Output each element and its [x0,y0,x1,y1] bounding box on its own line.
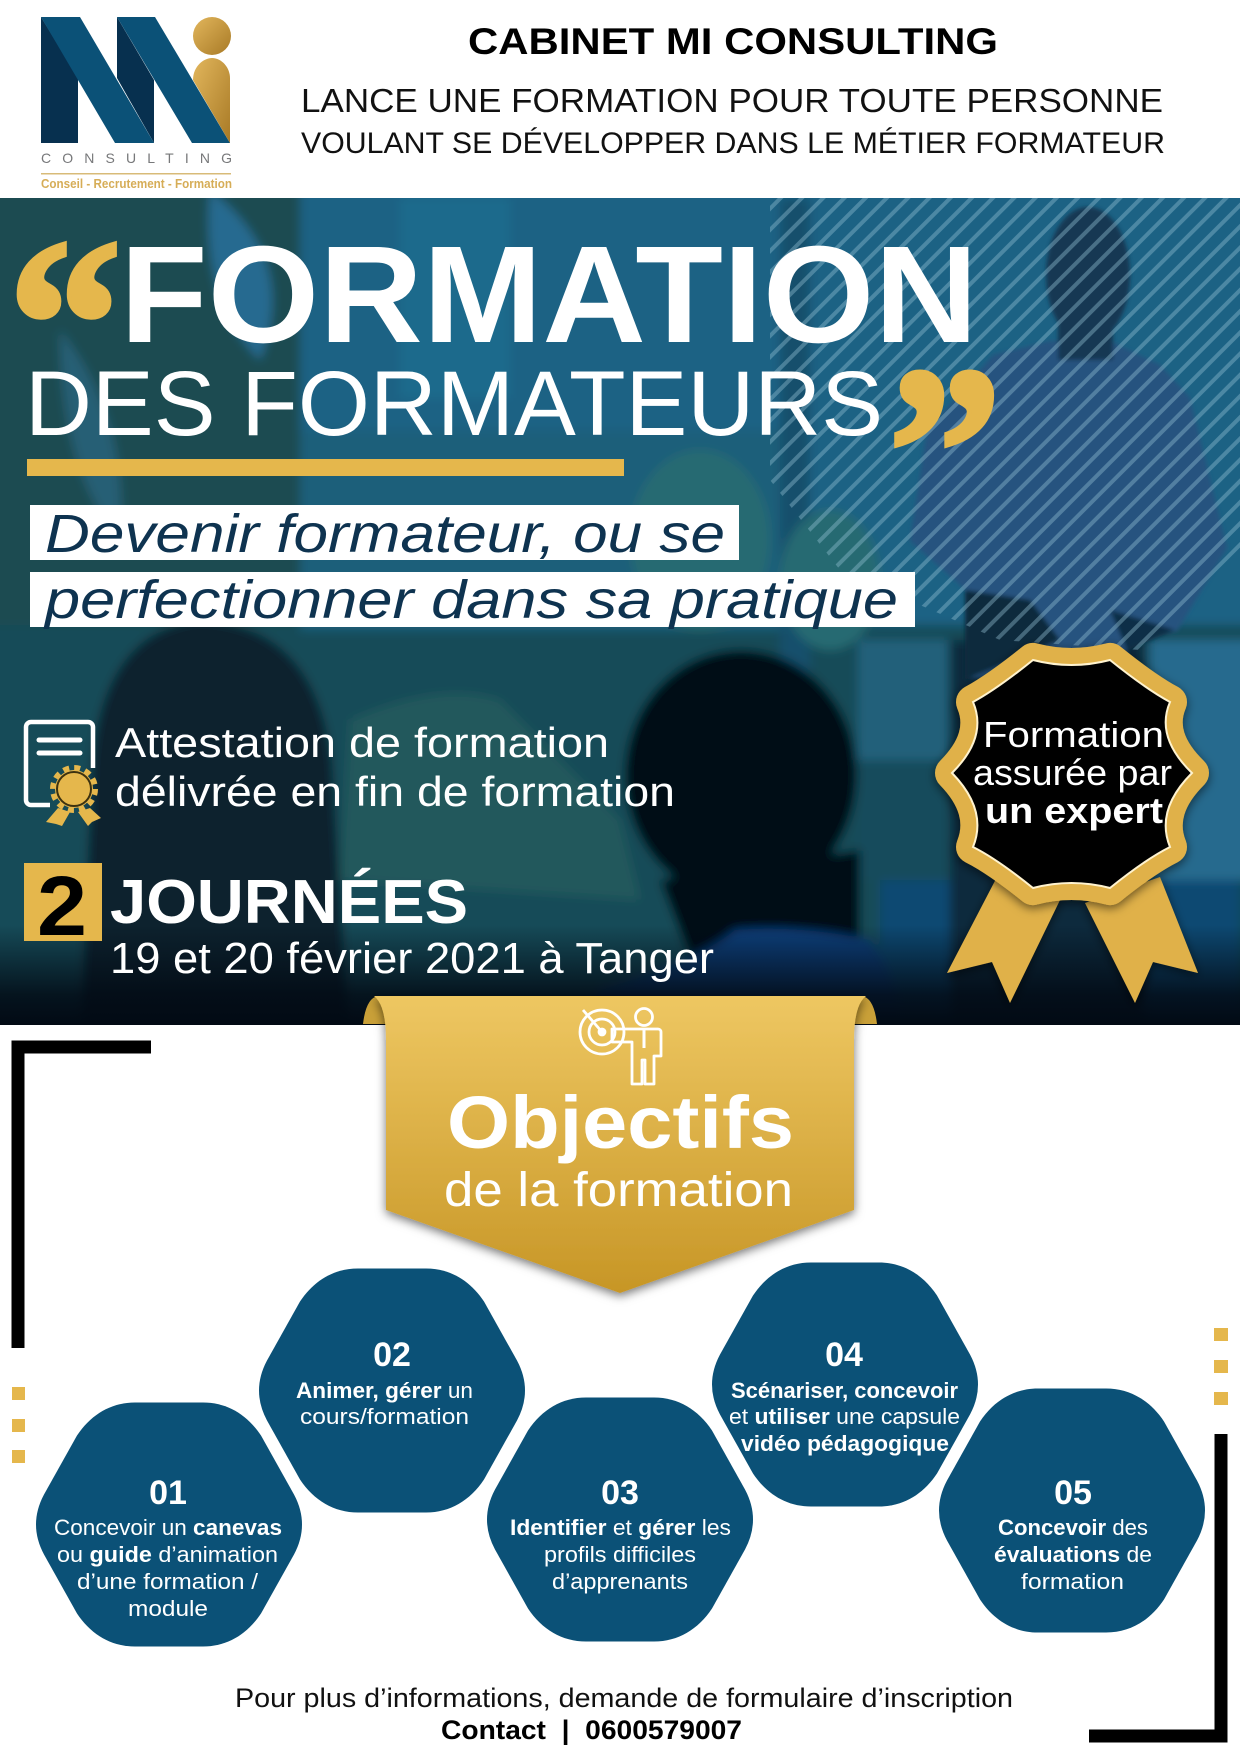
objective 01: d’une formation / [77,1569,259,1594]
objective 03: d’apprenants [552,1569,688,1594]
bottom-right corner bracket [1089,1434,1221,1736]
subtitle: DES FORMATEURS: DES FORMATEURS [25,353,883,455]
objective 04: Scénariser, concevoir [731,1378,958,1403]
attestation text: Attestation de formation [115,719,609,766]
header text [301,21,1165,160]
objective 01: 01 [149,1474,187,1512]
duration: 2 journées: JOURNÉES [110,868,468,937]
objective 03 [487,1398,753,1642]
badge: expert seal with ribbons: assurée par [973,752,1172,793]
objective 02: cours/formation [300,1404,469,1429]
footer contact: Pour plus d’informations, demande de formulaire d’inscription [235,1683,1013,1713]
logo: MI Consulting [41,17,232,191]
tagline boxes: perfectionner dans sa pratique [43,570,898,630]
header text: CABINET MI CONSULTING [468,21,998,62]
objective 03: profils difficiles [544,1542,696,1567]
top-left corner bracket [18,1047,151,1348]
objective 01: Concevoir un canevas [54,1515,282,1540]
objective 02: Animer, gérer un [296,1378,473,1403]
objective 04: vidéo pédagogique [741,1431,949,1456]
title: FORMATION: FORMATION [120,218,978,372]
duration: 2 journées [24,859,714,983]
closing quote mark: ” [888,318,1002,586]
icon: target and person [580,1008,661,1084]
banner: objectifs: de la formation [444,1164,793,1217]
objective 03: Identifier et gérer les [510,1515,731,1540]
objective 02: 02 [373,1336,411,1374]
objective 05: Concevoir des [998,1515,1148,1540]
header text: VOULANT SE DÉVELOPPER DANS LE MÉTIER FORMATEUR [301,127,1165,160]
objective 04: 04 [825,1336,863,1374]
banner: objectifs: Objectifs [447,1081,794,1164]
gold squares left [12,1387,25,1463]
objective 01: ou guide d’animation [57,1542,278,1567]
objective 01 [36,1402,302,1646]
objective 05 [939,1388,1205,1632]
icon: certificate [26,722,101,826]
gold underline [27,459,624,476]
logo: MI Consulting: CONSULTING [41,150,232,166]
footer contact [235,1683,1013,1745]
objective 05: formation [1021,1569,1124,1594]
objective 04: et utiliser une capsule [729,1404,960,1429]
badge: expert seal with ribbons: un expert [985,790,1163,831]
badge: expert seal with ribbons: Formation [983,714,1164,755]
attestation text [115,719,675,815]
footer contact: Contact | 0600579007 [441,1715,742,1745]
hero photo background [0,180,1240,1045]
banner: objectifs [363,996,877,1293]
objective 04 [712,1262,978,1506]
header text: LANCE UNE FORMATION POUR TOUTE PERSONNE [301,82,1163,119]
duration: 2 journées: 19 et 20 février 2021 à Tanger [110,934,714,983]
tagline boxes: Devenir formateur, ou se [45,504,725,564]
gold squares right [1214,1328,1228,1405]
badge: expert seal with ribbons [947,660,1198,1003]
attestation text: délivrée en fin de formation [115,768,675,815]
objective 01: module [128,1596,208,1621]
tagline boxes [30,504,915,630]
objective 05: 05 [1054,1474,1092,1512]
objective 05: évaluations de [994,1542,1152,1567]
logo: MI Consulting: Conseil - Recrutement - Formation [41,176,232,191]
duration: 2 journées: 2 [37,859,87,953]
man silhouette [910,207,1227,680]
objective 03: 03 [601,1474,639,1512]
opening quote mark: “ [8,190,122,458]
objective 02 [259,1268,525,1512]
